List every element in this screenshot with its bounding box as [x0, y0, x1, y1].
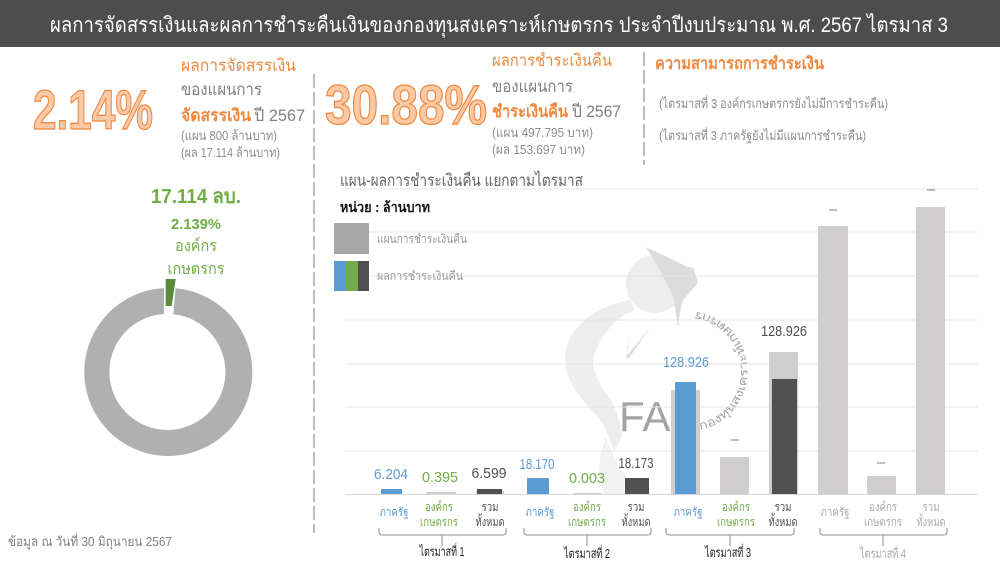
repayment text block: ของแผนการ — [492, 77, 573, 96]
category labels quarter 3 — [674, 500, 798, 529]
chart unit: หน่วย : ล้านบาท — [340, 199, 430, 215]
category labels quarter 3: เกษตรกร — [717, 515, 755, 529]
repayment text block: ปี 2567 — [571, 102, 621, 121]
category labels quarter 4: ภาครัฐ — [820, 505, 850, 519]
big figure: repayment percent: 30.88% — [325, 73, 487, 136]
quarter 3 bracket and label: ไตรมาสที่ 3 — [704, 544, 751, 560]
donut chart labels — [151, 186, 241, 278]
value labels: – — [731, 431, 740, 448]
quarter 3 bars — [671, 352, 798, 494]
donut chart labels: เกษตรกร — [168, 261, 225, 278]
gridlines — [345, 189, 978, 494]
value labels: 18.173 — [618, 455, 654, 472]
value labels: 128.926 — [761, 323, 807, 340]
category labels quarter 1: ทั้งหมด — [476, 513, 504, 529]
value labels: 128.926 — [663, 354, 709, 371]
category labels quarter 2: รวม — [628, 500, 644, 514]
divider right — [643, 52, 645, 165]
watermark logo — [565, 247, 748, 494]
quarter 2 bracket and label: ไตรมาสที่ 2 — [563, 545, 610, 561]
value labels: 0.003 — [569, 470, 605, 487]
big figure: allocation percent: 2.14% — [33, 78, 153, 141]
watermark logo: กองทุนสงเคราะห์เกษตรกร — [694, 312, 748, 430]
allocation text block: ผลการจัดสรรเงิน — [181, 56, 296, 75]
repayment text block — [492, 51, 621, 157]
allocation text block: ปี 2567 — [253, 106, 305, 125]
donut chart labels: องค์กร — [175, 236, 217, 255]
quarter 3 bracket and label — [666, 528, 794, 560]
category labels quarter 2: เกษตรกร — [568, 515, 606, 529]
repayment capability text block: (ไตรมาสที่ 3 ภาครัฐยังไม่มีแผนการชำระคืน) — [659, 127, 866, 144]
quarter 4 bracket and label — [820, 528, 947, 561]
category labels quarter 2: ทั้งหมด — [622, 513, 650, 529]
category labels quarter 4: ทั้งหมด — [916, 513, 946, 529]
category labels quarter 3: ภาครัฐ — [674, 505, 702, 519]
donut chart labels: 2.139% — [171, 216, 221, 233]
legend: ผลการชำระเงินคืน — [377, 269, 463, 283]
allocation text block: จัดสรรเงิน — [181, 106, 251, 125]
allocation text block: (ผล 17.114 ล้านบาท) — [181, 145, 280, 160]
quarter 1 bracket and label — [379, 528, 506, 559]
category labels quarter 4: รวม — [922, 500, 940, 514]
category labels quarter 4: เกษตรกร — [864, 515, 902, 529]
allocation text block: ของแผนการ — [181, 80, 262, 99]
category labels quarter 3: องค์กร — [722, 500, 750, 514]
category labels quarter 3: รวม — [774, 500, 792, 514]
category labels quarter 1: ภาครัฐ — [380, 505, 408, 519]
category labels quarter 2 — [526, 500, 650, 529]
quarter 4 bars — [818, 207, 945, 494]
repayment capability text block: ความสามารถการชำระเงิน — [655, 54, 824, 73]
value labels: – — [877, 454, 886, 471]
footer date note: ข้อมูล ณ วันที่ 30 มิถุนายน 2567 — [8, 533, 172, 550]
value labels: 6.204 — [374, 466, 408, 483]
category labels quarter 4: องค์กร — [869, 500, 897, 514]
quarter 1 bars — [381, 489, 504, 494]
allocation text block — [181, 56, 305, 160]
legend — [334, 223, 467, 291]
repayment text block: (แผน 497.795 บาท) — [492, 125, 593, 140]
category labels quarter 1: รวม — [482, 500, 498, 514]
value labels: 0.395 — [422, 469, 458, 486]
category labels quarter 4 — [820, 500, 946, 529]
quarter 2 bracket and label — [524, 528, 651, 561]
category labels quarter 1: เกษตรกร — [420, 515, 458, 529]
allocation text block: (แผน 800 ล้านบาท) — [181, 128, 277, 143]
header banner — [0, 0, 1000, 47]
quarter 2 bars — [527, 478, 649, 494]
value labels: 6.599 — [472, 465, 506, 482]
watermark logo: FA — [619, 393, 670, 440]
value labels: – — [829, 201, 838, 218]
repayment text block: ชำระเงินคืน — [492, 101, 568, 121]
value labels — [374, 181, 936, 487]
quarter 1 bracket and label: ไตรมาสที่ 1 — [419, 543, 464, 559]
category labels quarter 1 — [380, 500, 504, 529]
value labels: – — [927, 181, 936, 198]
divider left — [313, 74, 315, 533]
donut chart — [84, 279, 252, 456]
donut chart labels: 17.114 ลบ. — [151, 186, 241, 208]
category labels quarter 2: องค์กร — [573, 500, 601, 514]
repayment text block: ผลการชำระเงินคืน — [492, 51, 612, 70]
repayment capability text block: (ไตรมาสที่ 3 องค์กรเกษตรกรยังไม่มีการชำระคืน) — [659, 95, 888, 111]
chart title: แผน-ผลการชำระเงินคืน แยกตามไตรมาส — [340, 170, 583, 190]
category labels quarter 1: องค์กร — [425, 500, 453, 514]
repayment text block: (ผล 153.697 บาท) — [492, 142, 585, 157]
repayment capability text block — [655, 54, 888, 144]
category labels quarter 3: ทั้งหมด — [768, 513, 798, 529]
quarter 4 bracket and label: ไตรมาสที่ 4 — [859, 545, 906, 561]
legend: แผนการชำระเงินคืน — [377, 232, 467, 246]
value labels: 18.170 — [520, 456, 554, 473]
category labels quarter 2: ภาครัฐ — [526, 505, 554, 519]
